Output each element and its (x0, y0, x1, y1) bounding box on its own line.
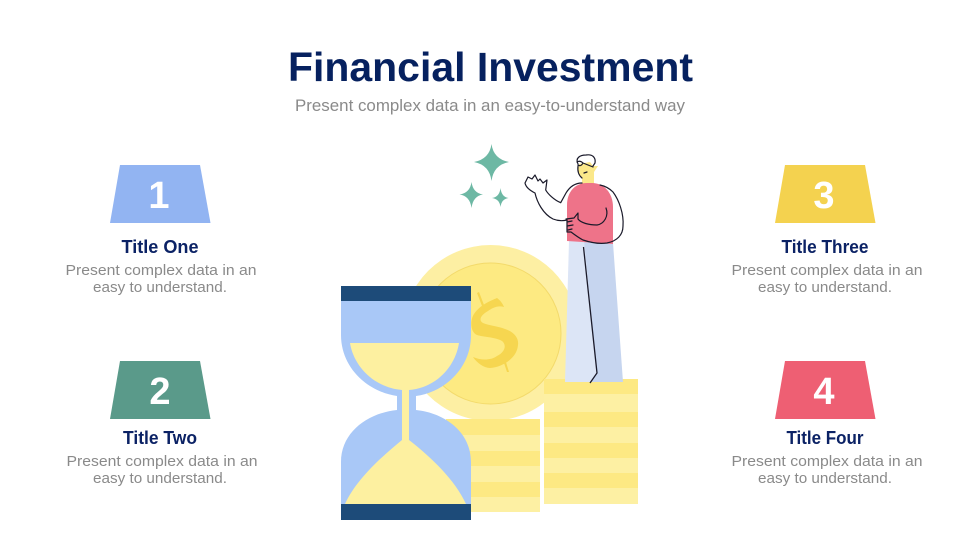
description two: Present complex data in an (66, 453, 258, 470)
description one: easy to understand. (93, 279, 227, 296)
arms and head linework (525, 155, 623, 243)
description three: easy to understand. (758, 279, 892, 296)
badge 1: 1 (148, 175, 170, 217)
top cap (341, 286, 471, 301)
heading: title three: Title Three (782, 237, 868, 257)
heading: title two: Title Two (123, 428, 197, 448)
icon: standing person (525, 155, 623, 383)
badge 4 (775, 361, 876, 419)
panel: item one (66, 165, 256, 296)
badge 2: 2 (149, 371, 171, 413)
sand (345, 343, 466, 504)
icon: hourglass (341, 286, 471, 520)
heading: title one: Title One (122, 237, 198, 257)
title: Financial Investment (288, 44, 693, 90)
panel: item three (732, 165, 922, 296)
description two: easy to understand. (93, 470, 227, 487)
badge 3 (775, 165, 876, 223)
heading: title four: Title Four (786, 428, 864, 448)
neck and face (578, 162, 598, 185)
torso (567, 183, 613, 244)
badge 2 (110, 361, 210, 419)
dollar sign (471, 292, 518, 372)
description three: Present complex data in an (732, 262, 922, 279)
subtitle: Present complex data in an easy-to-understand way (295, 97, 686, 115)
panel: item two (66, 361, 258, 487)
bottom cap (341, 504, 471, 520)
badge 3: 3 (813, 175, 835, 217)
illustration: investment scene (341, 144, 638, 520)
badge 1 (110, 165, 210, 223)
icon: sparkles (460, 144, 509, 208)
badge 4: 4 (813, 371, 835, 413)
icon: coin (402, 245, 578, 421)
description four: Present complex data in an (732, 453, 922, 470)
panel: item four (732, 361, 922, 487)
glass body (341, 301, 471, 504)
icon: short coin stack (446, 419, 540, 512)
description one: Present complex data in an (66, 262, 256, 279)
description four: easy to understand. (758, 470, 892, 487)
icon: tall coin stack (544, 379, 638, 504)
trousers (565, 241, 597, 382)
